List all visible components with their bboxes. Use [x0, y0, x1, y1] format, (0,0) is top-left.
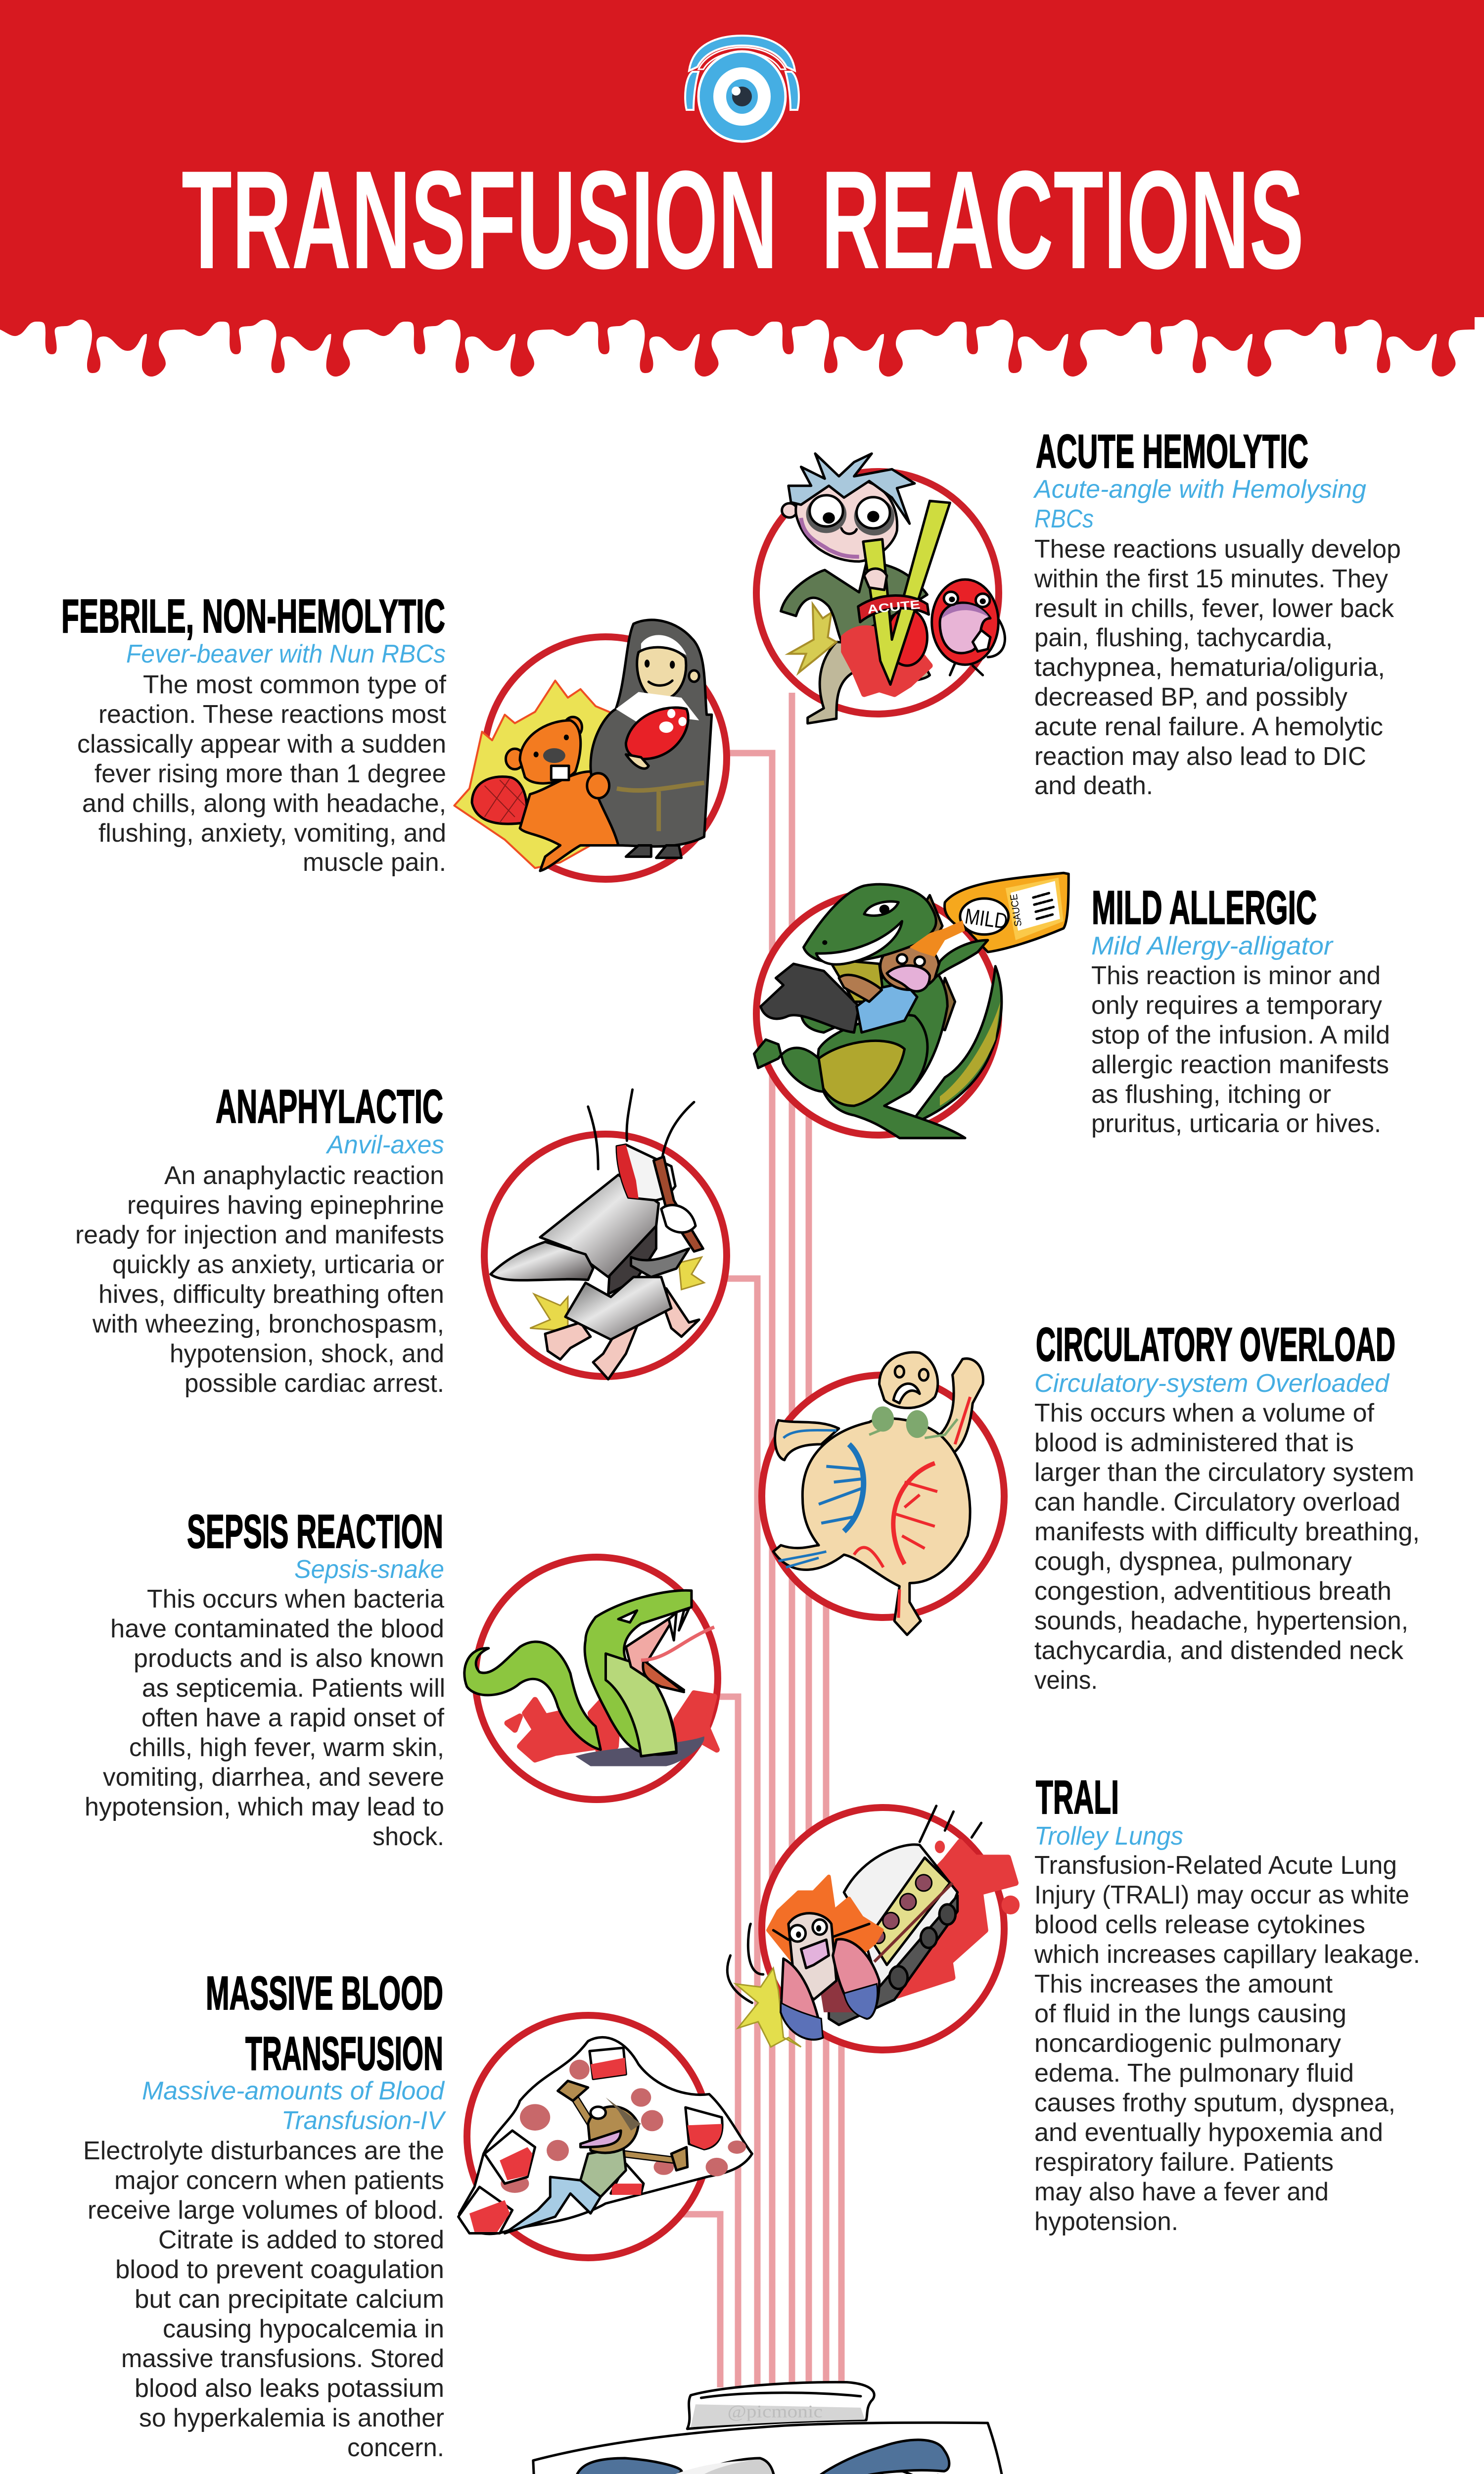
- description: [83, 2137, 444, 2462]
- description: as flushing, itching or: [1091, 1080, 1331, 1109]
- description: decreased BP, and possibly: [1034, 683, 1347, 712]
- heading: [206, 1967, 443, 2080]
- description: requires having epinephrine: [127, 1191, 444, 1220]
- panel: mild allergic: [754, 873, 1390, 1138]
- description: allergic reaction manifests: [1091, 1050, 1389, 1079]
- heading: TRALI: [1036, 1771, 1119, 1824]
- description: possible cardiac arrest.: [185, 1369, 444, 1398]
- illustration: alligator pouring sauce: MILD: [963, 904, 1009, 934]
- panel: sepsis reaction: [85, 1505, 718, 1851]
- description: [85, 1585, 445, 1851]
- description: which increases capillary leakage.: [1034, 1940, 1420, 1969]
- illustration: blood bag character squeezing transfusion: [396, 2382, 1264, 2474]
- description: only requires a temporary: [1091, 991, 1382, 1020]
- description: reaction. These reactions most: [98, 700, 447, 729]
- description: This occurs when bacteria: [147, 1585, 444, 1614]
- description: hypotension, shock, and: [170, 1339, 444, 1368]
- heading: ACUTE HEMOLYTIC: [1036, 425, 1308, 478]
- description: blood also leaks potassium: [135, 2374, 444, 2403]
- description: of fluid in the lungs causing: [1034, 1999, 1346, 2028]
- description: so hyperkalemia is another: [139, 2404, 444, 2432]
- description: [75, 1161, 444, 1398]
- heading: TRANSFUSION: [245, 2027, 443, 2080]
- description: Electrolyte disturbances are the: [83, 2137, 444, 2165]
- header banner with dripping blood: [0, 0, 1484, 377]
- description: blood cells release cytokines: [1034, 1910, 1365, 1939]
- panel: anaphylactic: [75, 1080, 727, 1398]
- description: with wheezing, bronchospasm,: [92, 1310, 444, 1338]
- illustration: man in massive amount of blood bags: [459, 2037, 752, 2234]
- description: edema. The pulmonary fluid: [1034, 2059, 1354, 2088]
- description: tachycardia, and distended neck: [1034, 1636, 1404, 1665]
- description: shock.: [372, 1822, 444, 1851]
- description: receive large volumes of blood.: [88, 2196, 444, 2225]
- mnemonic subtitle: Massive-amounts of Blood: [142, 2077, 445, 2105]
- description: classically appear with a sudden: [77, 730, 446, 759]
- description: [1034, 1851, 1420, 2236]
- description: may also have a fever and: [1034, 2178, 1329, 2206]
- mnemonic subtitle: RBCs: [1034, 505, 1094, 533]
- icon: Picmonic eye with headphones: [685, 36, 799, 142]
- description: reaction may also lead to DIC: [1034, 742, 1366, 771]
- mnemonic subtitle: Circulatory-system Overloaded: [1034, 1369, 1390, 1398]
- description: larger than the circulatory system: [1034, 1458, 1414, 1487]
- description: vomiting, diarrhea, and severe: [103, 1763, 444, 1792]
- description: An anaphylactic reaction: [164, 1161, 444, 1190]
- description: but can precipitate calcium: [135, 2285, 444, 2314]
- illustration: man with acute angle and hemolysing red blood cell: ACUTE: [867, 598, 921, 617]
- panel: acute hemolytic: [756, 425, 1401, 800]
- description: acute renal failure. A hemolytic: [1034, 713, 1383, 741]
- description: cough, dyspnea, pulmonary: [1034, 1547, 1352, 1576]
- illustration: alligator pouring sauce: [754, 873, 1068, 1138]
- mnemonic subtitle: Transfusion-IV: [281, 2106, 446, 2135]
- description: Injury (TRALI) may occur as white: [1034, 1881, 1409, 1909]
- description: massive transfusions. Stored: [121, 2344, 444, 2373]
- mnemonic subtitle: Sepsis-snake: [294, 1555, 444, 1584]
- description: congestion, adventitious breath: [1034, 1577, 1391, 1606]
- description: and eventually hypoxemia and: [1034, 2118, 1383, 2147]
- description: Transfusion-Related Acute Lung: [1034, 1851, 1397, 1880]
- mnemonic subtitle: [142, 2077, 446, 2135]
- description: tachypnea, hematuria/oliguria,: [1034, 653, 1385, 682]
- mnemonic subtitle: Trolley Lungs: [1034, 1822, 1183, 1851]
- description: [1091, 961, 1390, 1138]
- description: and chills, along with headache,: [82, 789, 446, 818]
- mnemonic subtitle: Anvil-axes: [325, 1131, 444, 1159]
- description: within the first 15 minutes. They: [1034, 565, 1388, 593]
- heading: MILD ALLERGIC: [1092, 881, 1317, 934]
- description: hypotension, which may lead to: [85, 1793, 444, 1821]
- description: [1034, 535, 1401, 800]
- description: as septicemia. Patients will: [142, 1674, 445, 1703]
- heading: FEBRILE, NON-HEMOLYTIC: [61, 590, 445, 643]
- description: have contaminated the blood: [110, 1615, 444, 1643]
- description: The most common type of: [143, 670, 447, 699]
- illustration: fever beaver with nun holding red blood cell: [454, 620, 712, 871]
- panel: massive blood transfusion: [83, 1967, 752, 2462]
- description: ready for injection and manifests: [75, 1221, 444, 1249]
- description: pruritus, urticaria or hives.: [1091, 1109, 1381, 1138]
- heading: ANAPHYLACTIC: [216, 1080, 443, 1133]
- illustration: alligator pouring sauce: SAUCE: [1008, 893, 1024, 927]
- panel: circulatory overload: [762, 1318, 1420, 1695]
- heading: SEPSIS REACTION: [187, 1505, 443, 1558]
- panel: TRALI: [727, 1771, 1420, 2236]
- description: products and is also known: [134, 1644, 444, 1673]
- description: pain, flushing, tachycardia,: [1034, 623, 1333, 652]
- illustration: overloaded round body with veins and arteries: [773, 1352, 983, 1635]
- description: hypotension.: [1034, 2207, 1178, 2236]
- description: hives, difficulty breathing often: [98, 1280, 444, 1309]
- watermark: @picmonic: [728, 2402, 823, 2422]
- description: major concern when patients: [114, 2166, 444, 2195]
- mnemonic subtitle: Fever-beaver with Nun RBCs: [126, 640, 446, 668]
- mnemonic subtitle: Acute-angle with Hemolysing: [1033, 475, 1366, 504]
- description: concern.: [347, 2433, 444, 2462]
- description: respiratory failure. Patients: [1034, 2148, 1334, 2177]
- description: sounds, headache, hypertension,: [1034, 1607, 1408, 1635]
- description: blood is administered that is: [1034, 1428, 1354, 1457]
- heading: MASSIVE BLOOD: [206, 1967, 443, 2020]
- description: veins.: [1034, 1666, 1098, 1695]
- illustration: sepsis snake rising from blood: [464, 1590, 717, 1766]
- description: blood to prevent coagulation: [115, 2255, 444, 2284]
- description: This occurs when a volume of: [1034, 1399, 1375, 1427]
- description: can handle. Circulatory overload: [1034, 1488, 1400, 1517]
- panel: febrile non-hemolytic: [61, 590, 727, 879]
- description: stop of the infusion. A mild: [1091, 1021, 1390, 1049]
- description: chills, high fever, warm skin,: [129, 1733, 444, 1762]
- description: flushing, anxiety, vomiting, and: [98, 819, 446, 848]
- illustration: trolley crashing into lungs: [727, 1806, 1020, 2047]
- description: [77, 670, 447, 877]
- description: causes frothy sputum, dyspnea,: [1034, 2089, 1395, 2117]
- description: This reaction is minor and: [1091, 961, 1381, 990]
- description: muscle pain.: [303, 848, 446, 877]
- title: TRANSFUSION: [182, 142, 778, 298]
- mnemonic subtitle: Mild Allergy-alligator: [1091, 932, 1334, 960]
- description: These reactions usually develop: [1034, 535, 1401, 564]
- description: This increases the amount: [1034, 1970, 1333, 1998]
- description: and death.: [1034, 771, 1153, 800]
- description: often have a rapid onset of: [141, 1704, 445, 1732]
- description: Citrate is added to stored: [158, 2226, 444, 2254]
- illustration: man with acute angle and hemolysing red blood cell: [781, 454, 1005, 723]
- illustration: anvil and axe crushing legs: [491, 1090, 704, 1380]
- description: fever rising more than 1 degree: [94, 760, 446, 788]
- description: result in chills, fever, lower back: [1034, 594, 1394, 623]
- description: [1034, 1399, 1420, 1695]
- description: manifests with difficulty breathing,: [1034, 1518, 1420, 1546]
- mnemonic subtitle: [1033, 475, 1366, 533]
- description: causing hypocalcemia in: [163, 2315, 444, 2343]
- description: noncardiogenic pulmonary: [1034, 2029, 1341, 2058]
- description: quickly as anxiety, urticaria or: [112, 1250, 444, 1279]
- connector tubes: [678, 693, 841, 2387]
